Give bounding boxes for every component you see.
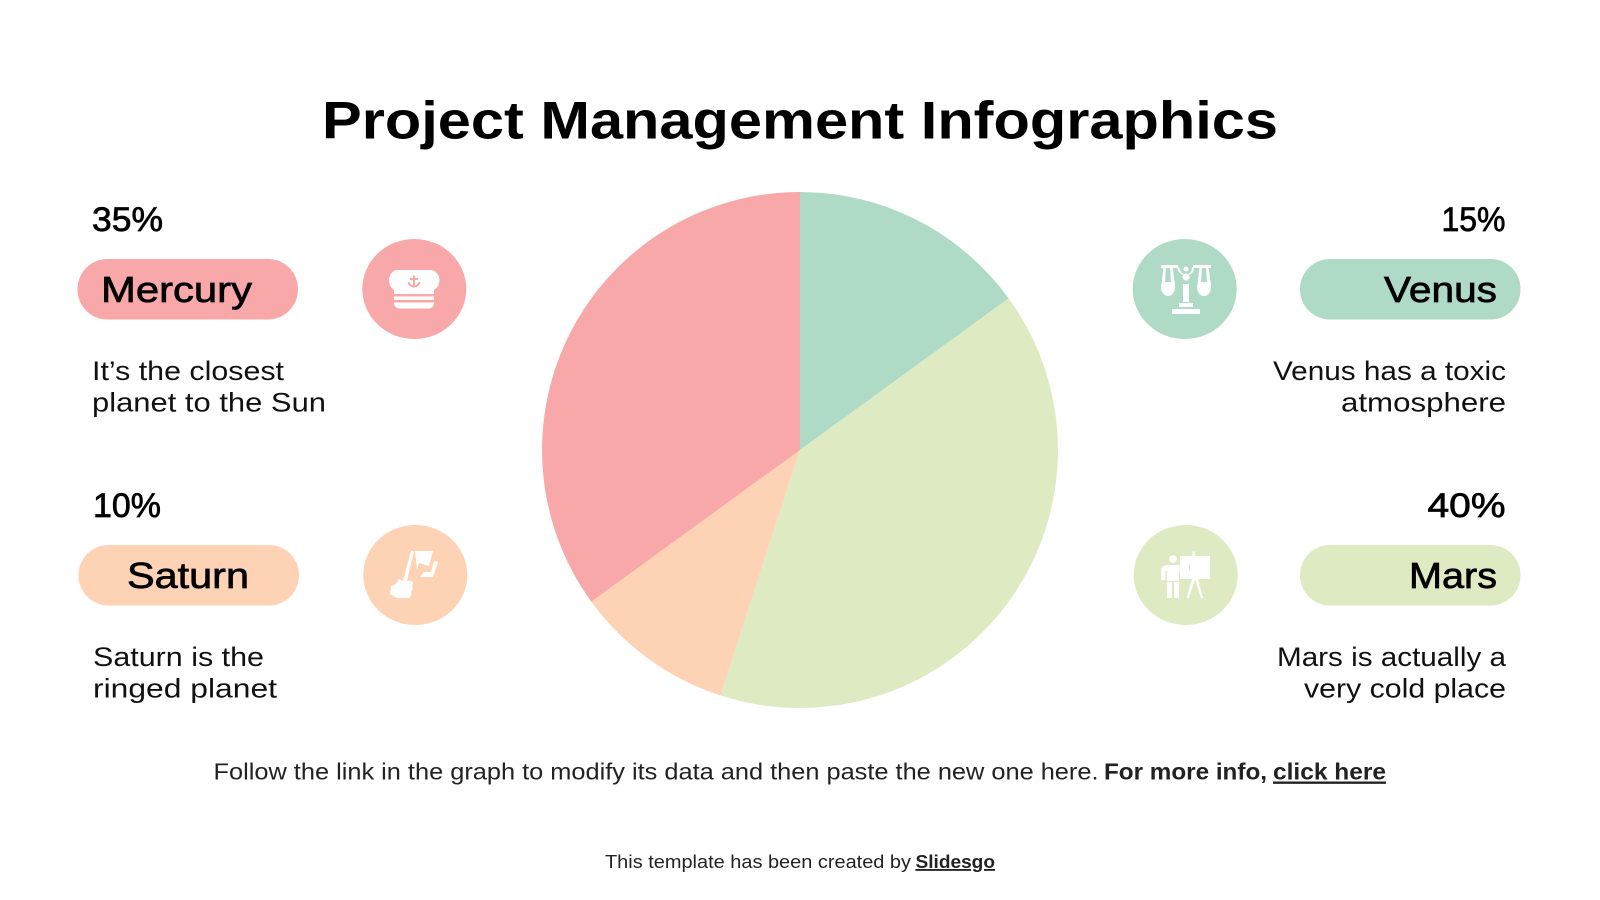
credit line: This template has been created by — [605, 851, 912, 872]
pill: Venus: Venus — [1384, 269, 1497, 310]
slice: Mercury 35% — [542, 192, 800, 602]
percentage: Venus: 15% — [1442, 201, 1506, 239]
icon: scales — [1133, 239, 1237, 339]
slice: Mars 40% — [720, 298, 1058, 708]
slice: Venus 15% — [800, 192, 1009, 450]
description: Saturn: Saturn is the — [93, 642, 264, 672]
description: Saturn — [93, 642, 278, 704]
pill: Mars — [1300, 545, 1520, 606]
credit line: Slidesgo — [916, 851, 995, 872]
panel: Saturn — [78, 487, 467, 704]
instruction text: Follow the link in the graph to modify its data and then paste the new one here. — [214, 758, 1098, 784]
description: Mars — [1277, 642, 1506, 704]
instruction text — [214, 758, 1386, 784]
description: Saturn: ringed planet — [93, 674, 278, 704]
instruction text: For more info, — [1104, 758, 1267, 784]
panel: Venus — [1133, 201, 1520, 418]
instruction text: click here — [1273, 758, 1386, 784]
slice: Saturn 10% — [591, 450, 800, 695]
pill: Saturn — [78, 545, 299, 606]
pill: Mercury: Mercury — [101, 269, 252, 310]
description: Mercury: planet to the Sun — [92, 388, 326, 418]
panel: Mercury — [78, 201, 466, 418]
panel: Mars — [1134, 487, 1520, 704]
icon: hand with flags — [363, 525, 467, 625]
pill: Saturn: Saturn — [127, 555, 249, 596]
pill: Mercury — [78, 259, 298, 320]
pill: Mars: Mars — [1409, 555, 1497, 596]
percentage: Saturn: 10% — [93, 487, 161, 525]
description: Mars: Mars is actually a — [1277, 642, 1506, 672]
description: Mars: very cold place — [1304, 674, 1506, 704]
description: Venus: atmosphere — [1341, 388, 1506, 418]
title: Project Management Infographics — [322, 92, 1278, 150]
description: Mercury: It’s the closest — [92, 356, 285, 386]
icon: presenter at easel — [1134, 525, 1238, 625]
pill: Venus — [1300, 259, 1520, 320]
percentage: Mercury: 35% — [92, 201, 163, 239]
pie chart — [542, 192, 1058, 708]
description: Venus — [1273, 356, 1506, 418]
icon: captain hat — [362, 239, 466, 339]
description: Mercury — [92, 356, 326, 418]
percentage: Mars: 40% — [1428, 487, 1506, 525]
description: Venus: Venus has a toxic — [1273, 356, 1506, 386]
